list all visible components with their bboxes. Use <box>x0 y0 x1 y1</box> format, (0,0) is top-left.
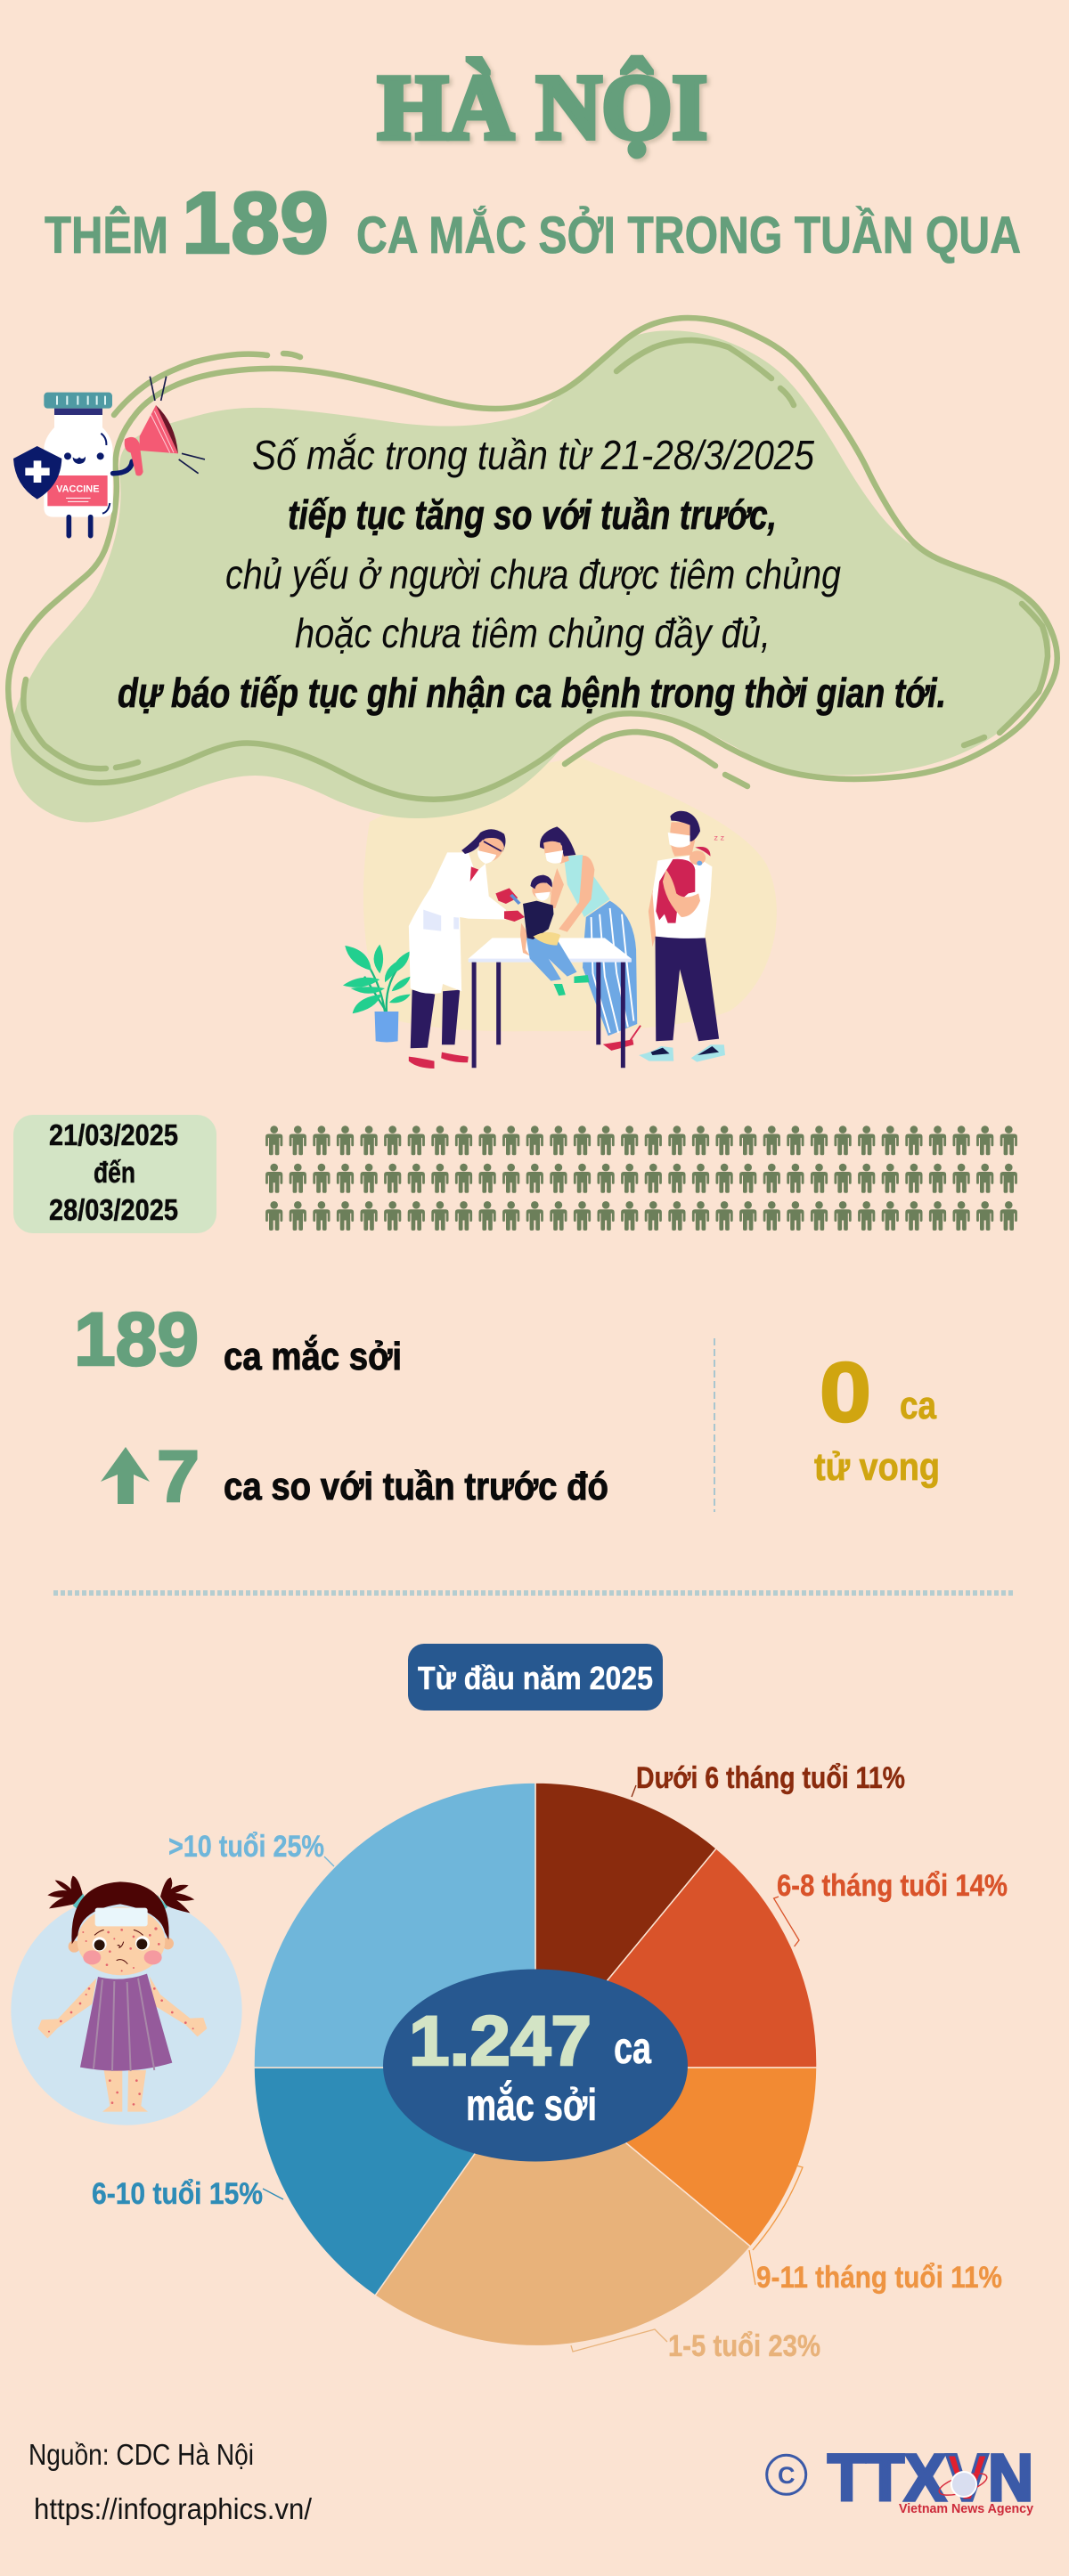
slice: 9-11 months <box>535 2068 817 2247</box>
subtitle <box>45 174 1021 272</box>
date box: 21/03/2025 <box>49 1118 178 1151</box>
leader lines <box>263 1785 803 2352</box>
source and website: https://infographics.vn/ <box>34 2492 313 2525</box>
father holding baby <box>639 811 725 1062</box>
stat: 189 cases: ca mắc sởi <box>224 1334 402 1378</box>
heading pill: since the start of 2025 <box>408 1644 663 1711</box>
father holding baby: z z <box>714 833 724 841</box>
labels: 1-5 tuổi 23% <box>668 2329 820 2363</box>
arms <box>38 1979 96 2038</box>
summary text <box>118 432 946 716</box>
subtitle: THÊM <box>45 207 168 264</box>
stat: 0 deaths <box>814 1345 940 1489</box>
labels: 6-10 tuổi 15% <box>92 2177 263 2211</box>
summary text: Số mắc trong tuần từ 21-28/3/2025 <box>252 432 814 478</box>
child <box>520 875 590 995</box>
copyright mark <box>767 2455 806 2494</box>
labels: >10 tuổi 25% <box>168 1830 324 1864</box>
stat: up 7 cases versus previous week: ca so với tuần trước đó <box>224 1465 608 1508</box>
date box: 28/03/2025 <box>49 1193 178 1226</box>
stat: up 7 cases versus previous week: 7 <box>157 1436 200 1517</box>
slice: 6-8 months <box>535 1849 817 2068</box>
labels: 9-11 tháng tuổi 11% <box>756 2261 1002 2295</box>
labels: 6-8 tháng tuổi 14% <box>777 1869 1008 1903</box>
stat: 0 deaths: ca <box>900 1384 936 1427</box>
center total: mắc sởi <box>466 2080 597 2130</box>
slice: over 10 years <box>254 1783 535 2068</box>
heading pill: since the start of 2025: Từ đầu năm 2025 <box>418 1660 653 1696</box>
stat: 189 cases: 189 <box>74 1297 199 1381</box>
background shape behind the illustration <box>363 757 777 1031</box>
table <box>469 938 632 1068</box>
center total: ca <box>614 2023 652 2073</box>
rash spots <box>48 1927 194 2106</box>
mother <box>540 826 641 1050</box>
pictogram: rows of people <box>265 1125 1017 1231</box>
summary text: chủ yếu ở người chưa được tiêm chủng <box>225 551 841 597</box>
center total <box>383 1970 688 2162</box>
stat: up 7 cases versus previous week <box>101 1436 608 1517</box>
blob outline strokes <box>8 318 1057 800</box>
icon: vaccine bottle with shield and megaphone <box>13 377 205 536</box>
center total: 1.247 <box>409 2001 592 2080</box>
logo: TTXVN: Vietnam News Agency <box>899 2501 1034 2516</box>
chart: age breakdown pie <box>92 1761 1008 2363</box>
stat: 189 cases <box>74 1297 402 1381</box>
dress <box>80 1974 172 2071</box>
summary text: hoặc chưa tiêm chủng đầy đủ, <box>295 610 771 656</box>
slice: under 6 months <box>535 1783 716 2068</box>
doctor <box>409 829 525 1069</box>
source and website: Nguồn: CDC Hà Nội <box>29 2438 254 2471</box>
stat: 0 deaths: tử vong <box>814 1445 940 1489</box>
pigtails <box>47 1876 194 1913</box>
legs <box>102 2070 122 2112</box>
icon: child with measles rash <box>11 1876 242 2125</box>
slice: 1-5 years <box>375 2068 750 2346</box>
title: HÀ NỘI <box>378 56 707 158</box>
labels: Dưới 6 tháng tuổi 11% <box>636 1761 905 1795</box>
illustration: doctor vaccinating a child with parents <box>343 811 725 1069</box>
icon: vaccine bottle with shield and megaphone: VACCINE <box>56 484 100 495</box>
plant <box>343 945 411 1042</box>
labels <box>92 1761 1008 2363</box>
source and website <box>29 2438 313 2525</box>
summary text: tiếp tục tăng so với tuần trước, <box>288 492 777 538</box>
stat: 0 deaths: 0 <box>820 1345 871 1440</box>
head <box>69 1940 80 1953</box>
blob fill <box>11 330 1050 823</box>
icon: up arrow <box>101 1447 150 1504</box>
subtitle: 189 <box>182 174 329 272</box>
logo: TTXVN: TTXVN <box>828 2441 1033 2515</box>
date box <box>13 1115 216 1233</box>
slice: 6-10 years <box>254 2068 535 2296</box>
copyright mark: C <box>778 2462 795 2489</box>
date box: đến <box>94 1156 135 1189</box>
panel: green summary blob <box>8 318 1057 823</box>
